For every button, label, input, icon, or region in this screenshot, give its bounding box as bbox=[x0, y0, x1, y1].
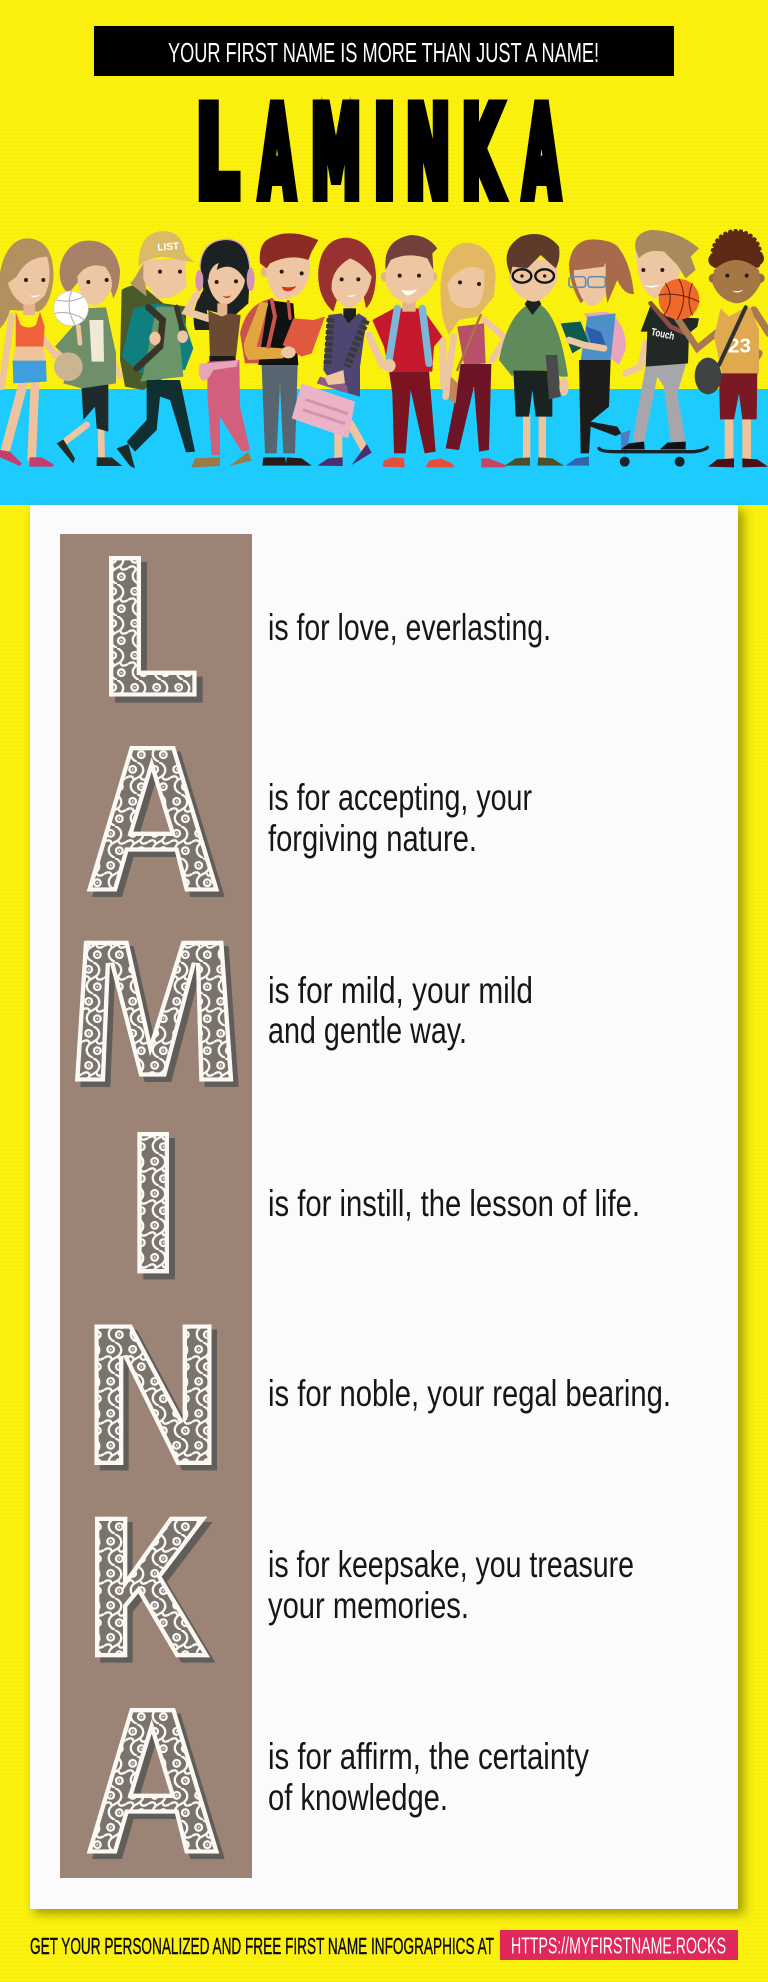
text: M bbox=[268, 970, 533, 1051]
text: M: is for mild, your mild bbox=[268, 970, 533, 1011]
character: boy with cap and backpack bbox=[117, 231, 220, 468]
character: girl with headphones bbox=[187, 239, 255, 467]
text: A bbox=[524, 83, 560, 224]
text: A: is for accepting, your bbox=[268, 777, 532, 818]
white card shadow bbox=[34, 510, 744, 1914]
character: blonde girl bbox=[440, 243, 506, 467]
white card bbox=[30, 505, 738, 1909]
character: girl with ponytail and tablet bbox=[561, 239, 634, 466]
character: skater boy with basketball bbox=[599, 230, 724, 467]
title: name: K bbox=[462, 83, 503, 224]
crowd illustration: left half bbox=[0, 231, 376, 468]
text: A (final): of knowledge. bbox=[268, 1777, 448, 1818]
text: K bbox=[268, 1544, 634, 1626]
letter K bbox=[95, 1517, 215, 1663]
character: boy with cap and backpack: LIST bbox=[157, 241, 179, 254]
text: N: is for noble, your regal bearing. bbox=[268, 1373, 671, 1414]
character: girl with pink case bbox=[292, 238, 376, 466]
character: boy with glasses bbox=[499, 234, 569, 466]
character: girl with volleyball bbox=[54, 241, 122, 466]
character: skater boy with basketball: Touch bbox=[650, 326, 675, 343]
character: boy with book bbox=[240, 233, 325, 466]
letter A bbox=[87, 746, 225, 897]
text: A (final): is for affirm, the certainty bbox=[268, 1736, 589, 1777]
character: curly-haired boy with tank top bbox=[695, 231, 768, 467]
character: boy in red shirt bbox=[369, 235, 454, 467]
letter N bbox=[94, 1324, 217, 1470]
letter L bbox=[109, 556, 203, 703]
title: name: M bbox=[311, 83, 361, 224]
text: A (final) bbox=[268, 1736, 589, 1818]
letter column bbox=[60, 534, 252, 1878]
title: name: I bbox=[374, 83, 395, 224]
character: girl in orange top bbox=[0, 238, 78, 467]
text: M: and gentle way. bbox=[268, 1010, 467, 1051]
text: K: your memories. bbox=[268, 1585, 469, 1626]
crowd illustration: right half bbox=[369, 230, 768, 467]
text: L: is for love, everlasting. bbox=[268, 607, 551, 648]
title: name: A bbox=[260, 83, 295, 224]
top banner bbox=[94, 26, 674, 76]
title: name: N bbox=[406, 83, 450, 224]
cyan floor band bbox=[0, 389, 768, 505]
text: K: is for keepsake, you treasure bbox=[268, 1544, 634, 1585]
text: I: is for instill, the lesson of life. bbox=[268, 1183, 640, 1224]
letter M bbox=[75, 941, 239, 1087]
text: A: forgiving nature. bbox=[268, 818, 477, 859]
letter I bbox=[137, 1132, 175, 1279]
text: A bbox=[268, 777, 532, 859]
title: name bbox=[196, 83, 560, 224]
character: curly-haired boy with tank top: 23 bbox=[728, 335, 751, 358]
title: name: L bbox=[196, 83, 238, 224]
letter A (final) bbox=[87, 1708, 225, 1859]
